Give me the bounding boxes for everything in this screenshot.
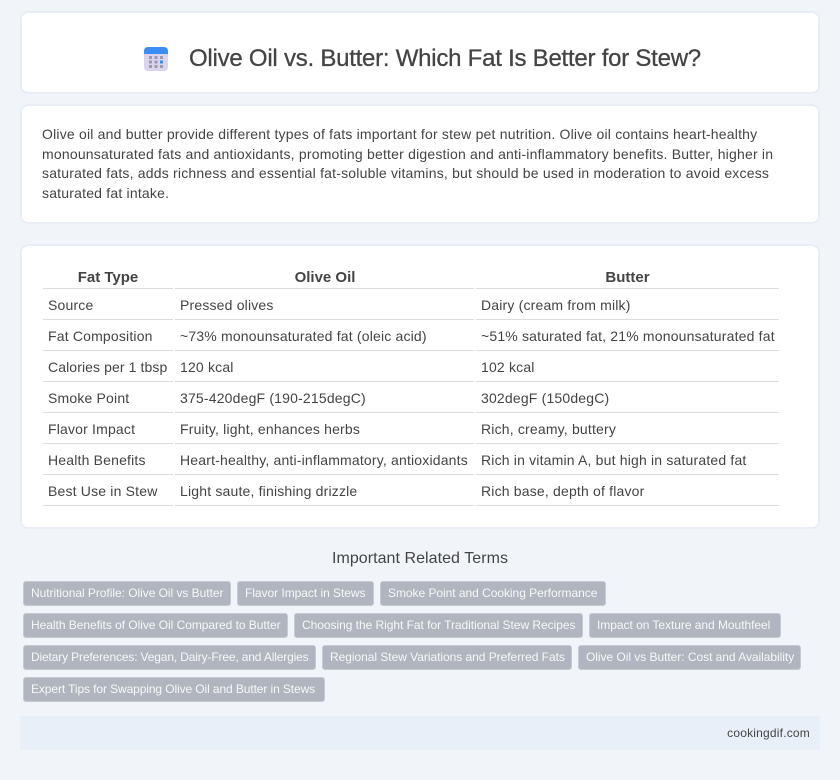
- comparison table: Health Benefits: [48, 452, 146, 468]
- comparison table: Pressed olives: [180, 297, 274, 313]
- panel: introduction: [20, 104, 820, 224]
- related term tags: Nutritional Profile: Olive Oil vs Butter: [31, 586, 223, 600]
- comparison table: [43, 269, 779, 506]
- panel: comparison table: [20, 244, 820, 529]
- related term tags: Flavor Impact in Stews: [245, 586, 366, 600]
- intro text: monounsaturated fats and antioxidants, promoting better digestion and anti-inflammatory benefits. Butter, higher in: [42, 146, 773, 162]
- comparison table: 302degF (150degC): [481, 390, 609, 406]
- intro text: Olive oil and butter provide different types of fats important for stew pet nutrition. Olive oil contains heart-healthy: [42, 126, 757, 142]
- comparison table: ~73% monounsaturated fat (oleic acid): [180, 328, 427, 344]
- comparison table: Best Use in Stew: [48, 483, 157, 499]
- related terms heading: Important Related Terms: [332, 550, 508, 567]
- table header: Fat Type: [78, 269, 138, 286]
- comparison table: Calories per 1 tbsp: [48, 359, 167, 375]
- footer bar: [20, 716, 820, 750]
- comparison table: Smoke Point: [48, 390, 129, 406]
- related term tags: Choosing the Right Fat for Traditional Stew Recipes: [302, 618, 575, 632]
- related term tags: Impact on Texture and Mouthfeel: [597, 618, 770, 632]
- header panel: [20, 11, 820, 94]
- related term tags: [23, 581, 801, 702]
- comparison table: Rich in vitamin A, but high in saturated fat: [481, 452, 747, 468]
- comparison table: Rich base, depth of flavor: [481, 483, 644, 499]
- comparison table: Fruity, light, enhances herbs: [180, 421, 360, 437]
- related term tags: Dietary Preferences: Vegan, Dairy-Free, and Allergies: [31, 650, 309, 664]
- comparison table: ~51% saturated fat, 21% monounsaturated fat: [481, 328, 775, 344]
- comparison table: Dairy (cream from milk): [481, 297, 631, 313]
- comparison table: 102 kcal: [481, 359, 535, 375]
- comparison table: 120 kcal: [180, 359, 234, 375]
- intro text: [42, 126, 773, 200]
- comparison table: Heart-healthy, anti-inflammatory, antioxidants: [180, 452, 468, 468]
- intro text: saturated fats, adds richness and essential fat-soluble vitamins, but should be used in moderation to avoid excess: [42, 165, 769, 181]
- related term tags: Olive Oil vs Butter: Cost and Availability: [586, 650, 794, 664]
- related term tags: Expert Tips for Swapping Olive Oil and Butter in Stews: [31, 682, 315, 696]
- comparison table: Light saute, finishing drizzle: [180, 483, 357, 499]
- related term tags: Regional Stew Variations and Preferred Fats: [330, 650, 565, 664]
- comparison table: Butter: [605, 269, 650, 286]
- icon: calendar: [144, 47, 168, 71]
- comparison table: Source: [48, 297, 93, 313]
- comparison table: 375-420degF (190-215degC): [180, 390, 366, 406]
- comparison table: Rich, creamy, buttery: [481, 421, 616, 437]
- intro text: saturated fat intake.: [42, 184, 169, 200]
- comparison table: Fat Composition: [48, 328, 153, 344]
- footer source: cookingdif.com: [727, 726, 810, 740]
- comparison table: Flavor Impact: [48, 421, 135, 437]
- related term tags: Smoke Point and Cooking Performance: [388, 586, 597, 600]
- related term tags: Health Benefits of Olive Oil Compared to Butter: [31, 618, 281, 632]
- title: Olive Oil vs. Butter: Which Fat Is Better for Stew?: [189, 45, 701, 72]
- comparison table: Olive Oil: [295, 269, 355, 286]
